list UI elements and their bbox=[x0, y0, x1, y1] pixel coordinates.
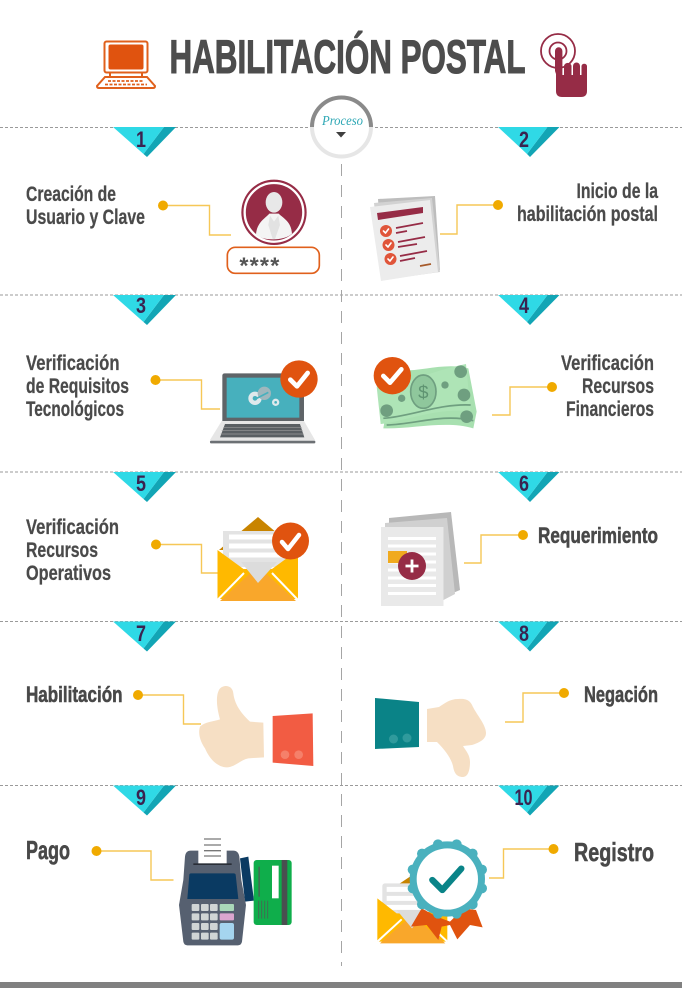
icon: envelope with check bbox=[218, 517, 309, 601]
label 8: Negación bbox=[584, 682, 658, 707]
icon: user and password: **** bbox=[239, 253, 280, 279]
number badge 8 bbox=[498, 621, 560, 652]
label 2: Inicio de la bbox=[576, 180, 658, 203]
number badge 10: 10 bbox=[514, 785, 532, 810]
icon: certified badge and envelope bbox=[377, 839, 487, 943]
icon: card payment terminal bbox=[179, 835, 292, 945]
connector 8 bbox=[505, 688, 569, 722]
number badge 9 bbox=[113, 785, 176, 816]
icon: user and password bbox=[227, 180, 319, 279]
icon: checklist document bbox=[370, 196, 440, 281]
label 2 bbox=[517, 180, 658, 226]
connector 6 bbox=[464, 530, 528, 563]
label 5: Recursos bbox=[26, 539, 98, 562]
label 3: de Requisitos bbox=[26, 375, 129, 398]
number badge 5: 5 bbox=[136, 471, 146, 496]
number badge 7: 7 bbox=[136, 621, 146, 646]
label 1: Usuario y Clave bbox=[26, 206, 145, 229]
connector 9 bbox=[92, 846, 174, 880]
number badge 5 bbox=[113, 471, 176, 502]
icon: proceso circle bbox=[312, 98, 371, 156]
panel: step 7 bbox=[26, 621, 313, 767]
number badge 7 bbox=[113, 621, 176, 652]
panel: step 9 bbox=[26, 785, 292, 945]
label 4: Verificación bbox=[561, 352, 654, 375]
connector 4 bbox=[492, 382, 557, 415]
number badge 8: 8 bbox=[519, 621, 529, 646]
number badge 6 bbox=[498, 471, 560, 502]
number badge 2: 2 bbox=[519, 127, 529, 152]
label 5: Verificación bbox=[26, 516, 119, 539]
label 4 bbox=[561, 352, 654, 421]
label 1 bbox=[26, 183, 145, 229]
icon: laptop with gears bbox=[210, 360, 318, 443]
number badge 1 bbox=[113, 127, 176, 157]
label 5: Operativos bbox=[26, 562, 111, 585]
panel: step 2 bbox=[370, 127, 658, 281]
label 10: Registro bbox=[574, 837, 654, 867]
panel: step 5 bbox=[26, 471, 309, 601]
number badge 3 bbox=[113, 293, 176, 325]
connector 5 bbox=[151, 540, 218, 573]
panel: step 3 bbox=[26, 293, 318, 443]
number badge 2 bbox=[498, 127, 560, 157]
label 9: Pago bbox=[26, 835, 70, 865]
icon: banknotes with check: $ bbox=[418, 381, 429, 402]
panel: step 4 bbox=[374, 293, 654, 428]
connector 10 bbox=[489, 844, 558, 878]
connector 3 bbox=[150, 375, 220, 409]
label 5 bbox=[26, 516, 119, 585]
number badge 10 bbox=[498, 785, 560, 816]
icon: down arrow bbox=[336, 132, 346, 138]
label 3: Tecnológicos bbox=[26, 398, 124, 421]
panel: step 6 bbox=[381, 471, 658, 606]
connector 7 bbox=[133, 690, 201, 724]
icon: banknotes with check bbox=[374, 357, 477, 428]
connector 2 bbox=[440, 200, 503, 234]
icon: pointing hand bbox=[541, 34, 587, 97]
number badge 6: 6 bbox=[519, 471, 529, 496]
icon: thumbs up bbox=[199, 686, 313, 767]
number badge 3: 3 bbox=[136, 293, 146, 318]
icon: computer bbox=[97, 42, 155, 88]
connector 1 bbox=[158, 200, 231, 235]
footer bar bbox=[0, 982, 682, 988]
label 4: Recursos bbox=[582, 375, 654, 398]
panel: step 1 bbox=[26, 127, 319, 279]
number badge 4 bbox=[498, 293, 560, 325]
proceso label: Proceso bbox=[321, 114, 363, 129]
label 1: Creación de bbox=[26, 183, 116, 206]
label 4: Financieros bbox=[566, 398, 654, 421]
panel: step 10 bbox=[377, 785, 654, 943]
icon: document with plus bbox=[381, 512, 460, 606]
number badge 9: 9 bbox=[136, 785, 146, 810]
panel: step 8 bbox=[375, 621, 658, 777]
label 7: Habilitación bbox=[26, 682, 122, 707]
icon: thumbs down bbox=[375, 698, 486, 777]
number badge 4: 4 bbox=[519, 293, 530, 318]
number badge 1: 1 bbox=[136, 127, 146, 152]
label 3 bbox=[26, 352, 129, 421]
label 3: Verificación bbox=[26, 352, 120, 375]
